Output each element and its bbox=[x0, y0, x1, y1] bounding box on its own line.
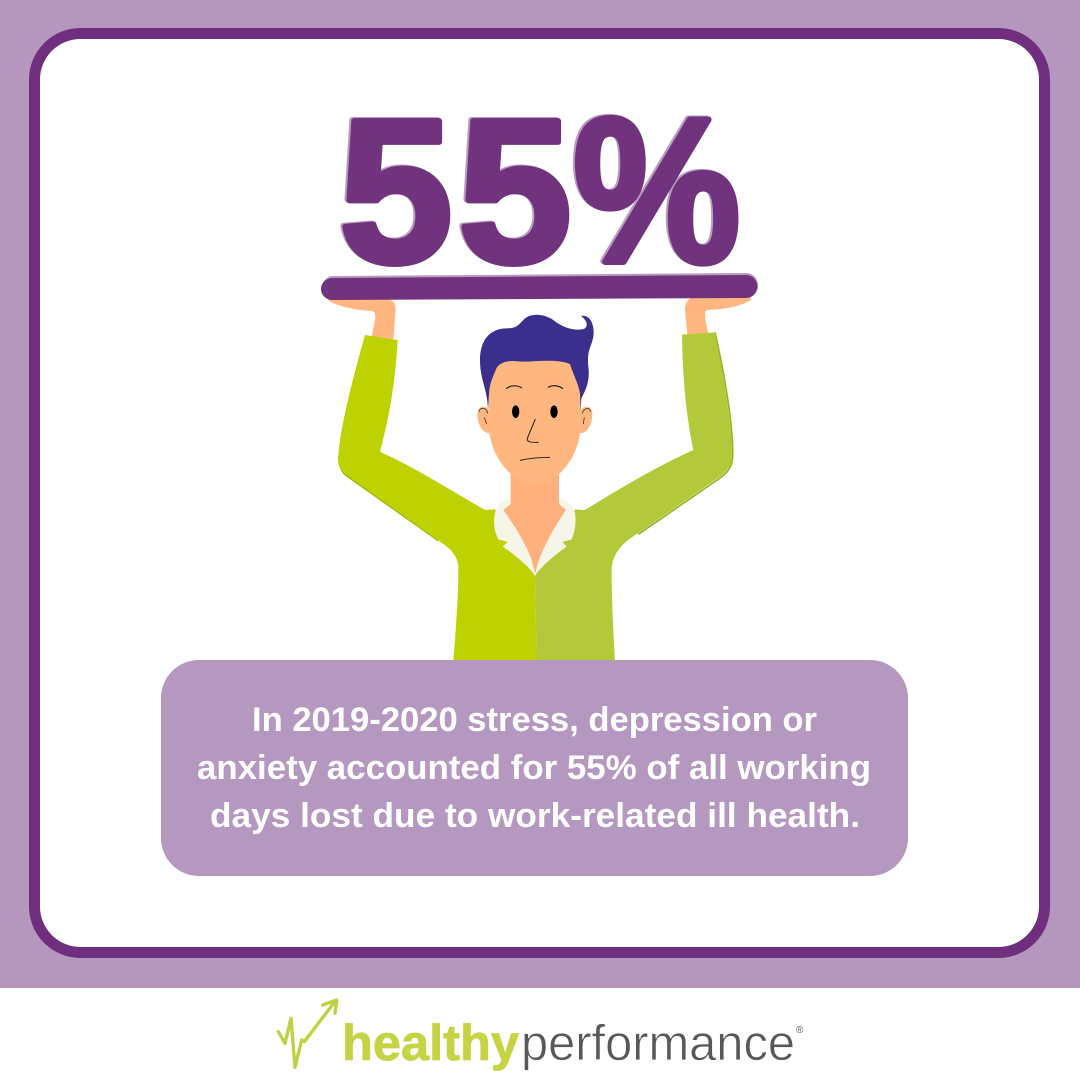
eyebrows bbox=[506, 386, 563, 389]
jacket right half bbox=[535, 332, 732, 661]
logo wordmark bbox=[342, 1015, 804, 1071]
stat shadow bbox=[337, 74, 739, 305]
stat number bbox=[339, 75, 741, 306]
caption text bbox=[197, 701, 871, 835]
neck and chest bbox=[495, 460, 575, 573]
logo icon: pulse arrow bbox=[278, 1000, 337, 1067]
shirt collar left bbox=[494, 499, 535, 575]
caption text: In 2019-2020 stress, depression or bbox=[252, 701, 817, 739]
logo wordmark: ® bbox=[796, 1025, 804, 1036]
caption panel bbox=[161, 660, 908, 876]
stat number: 5 bbox=[458, 77, 572, 306]
hair bbox=[480, 315, 594, 410]
footer logo bbox=[278, 1000, 804, 1071]
right hand bbox=[685, 297, 751, 335]
stat number: % bbox=[573, 75, 741, 306]
right sleeve shadow bbox=[638, 332, 733, 534]
left sleeve shadow bbox=[339, 455, 438, 541]
right ear bbox=[579, 407, 592, 433]
eyes bbox=[512, 405, 558, 418]
nose bbox=[527, 419, 539, 442]
left ear bbox=[477, 407, 491, 433]
main white panel with purple border bbox=[34, 34, 1044, 952]
left hand bbox=[328, 297, 396, 339]
stat number: 5 bbox=[339, 77, 453, 306]
bar held overhead bbox=[321, 273, 758, 300]
stat shadow: 5 bbox=[337, 76, 451, 305]
face bbox=[489, 353, 581, 485]
jacket left half bbox=[338, 335, 537, 661]
ear details bbox=[479, 408, 591, 424]
stat shadow: 5 bbox=[456, 76, 570, 305]
logo wordmark: performance bbox=[521, 1015, 795, 1071]
statistic: 55% bbox=[337, 74, 741, 306]
person holding up the statistic bbox=[328, 297, 751, 661]
logo wordmark: healthy bbox=[342, 1015, 519, 1071]
stat shadow: % bbox=[571, 74, 739, 305]
caption text: days lost due to work-related ill health. bbox=[210, 797, 860, 835]
shirt collar right bbox=[535, 499, 576, 575]
mouth bbox=[520, 457, 550, 460]
caption text: anxiety accounted for 55% of all working bbox=[197, 749, 871, 787]
